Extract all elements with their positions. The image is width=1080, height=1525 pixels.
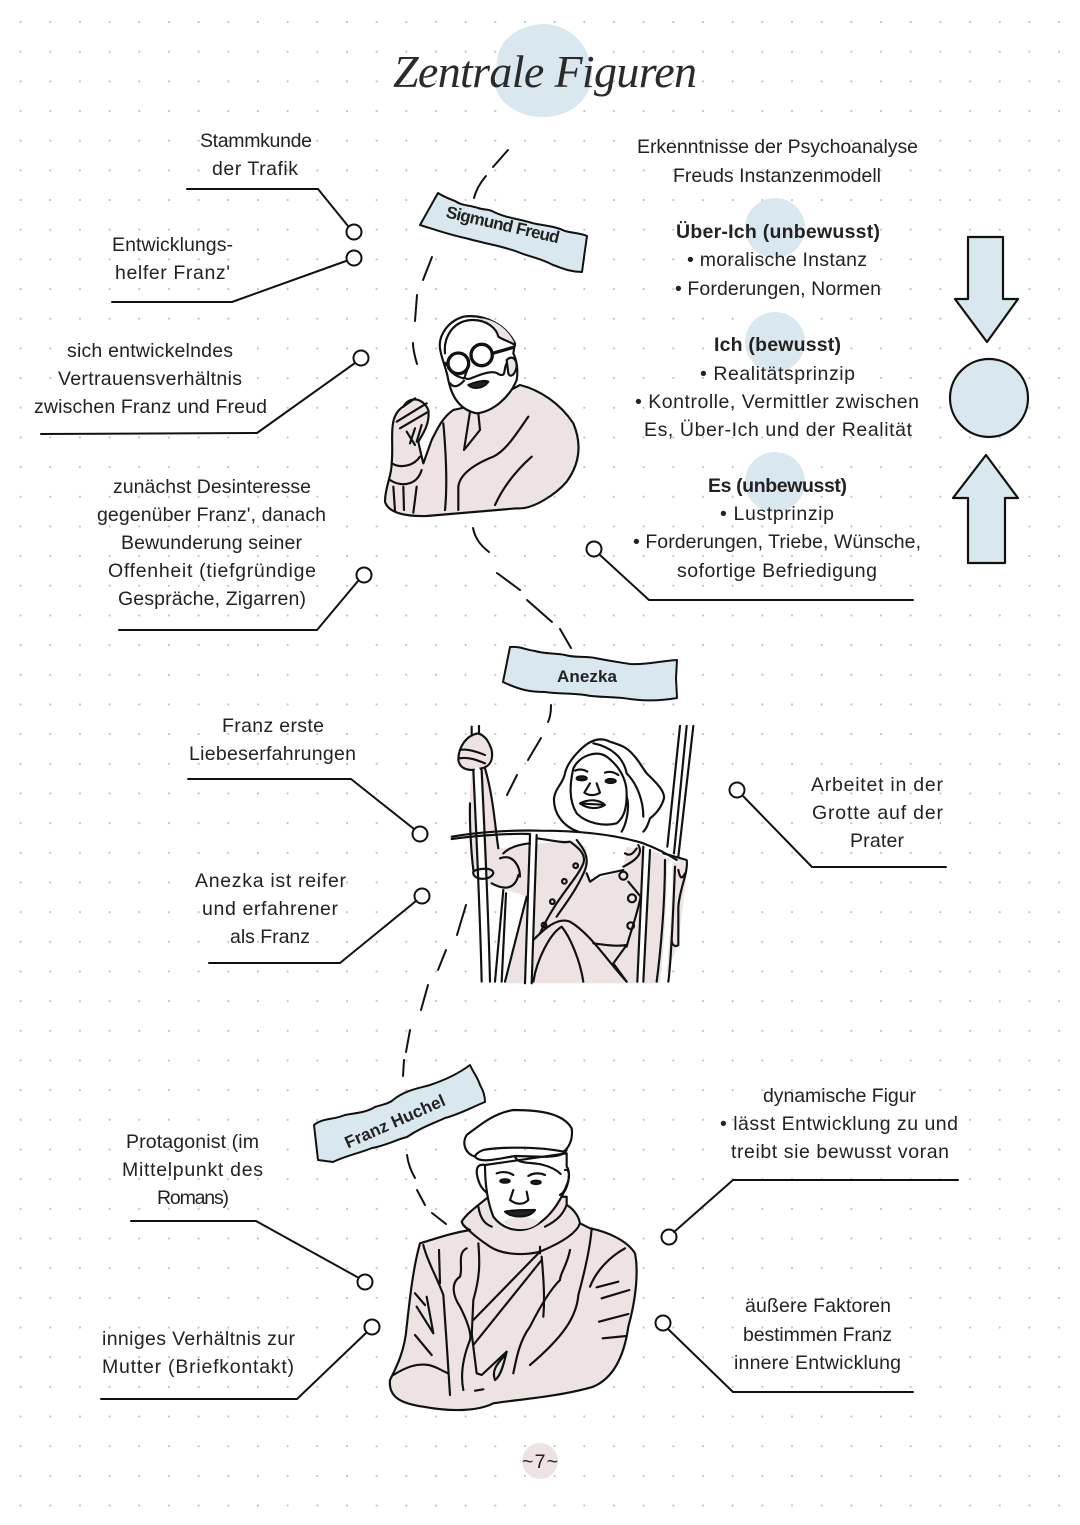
label: Anezka [503,647,677,700]
figure: Freud [385,316,578,516]
callout: Arbeitet in der Grotte: Prater [850,830,904,852]
callout: Protagonist: Mittelpunkt des [122,1159,263,1181]
callout: Desinteresse und Bewunderung: gegenüber Franz', danach [97,504,326,526]
title highlight blob [495,24,592,117]
callout: Entwicklungshelfer: helfer Franz' [115,262,230,284]
text block: Erkenntnisse der Psychoanalyse [637,136,918,187]
callout: Entwicklungshelfer [112,234,362,302]
callout: dynamische Figur: dynamische Figur [763,1085,916,1107]
callout: Liebeserfahrungen: Liebeserfahrungen [189,743,356,765]
text block: Über-Ich: • Forderungen, Normen [675,278,881,300]
text block: Über-Ich: Über-Ich (unbewusst) [676,220,880,243]
callout: Liebeserfahrungen: Franz erste [222,715,324,737]
icon: up arrow [953,455,1018,563]
label: Franz Huchel [314,1065,485,1162]
callout: Desinteresse und Bewunderung: Offenheit (tiefgründige [108,560,316,582]
text block: Es [633,475,921,582]
page number: ~7~ [522,1451,558,1473]
callout: äußere Faktoren: bestimmen Franz [743,1324,892,1346]
callout: Arbeitet in der Grotte [730,774,946,867]
callout: Vertrauensverhältnis: sich entwickelndes [67,340,233,362]
label: Sigmund Freud: Sigmund Freud [444,203,562,247]
callout: äußere Faktoren [656,1295,913,1392]
text block: Es: • Lustprinzip [720,503,834,525]
callout: Anezka ist reifer: Anezka ist reifer [195,870,346,892]
label: Franz Huchel: Franz Huchel [342,1091,448,1152]
text block: Ich: Ich (bewusst) [714,334,841,356]
callout: Anezka ist reifer: und erfahrener [202,898,338,920]
callout: Protagonist [122,1131,372,1290]
text block: Über-Ich: • moralische Instanz [687,249,867,271]
callout: dynamische Figur: treibt sie bewusst voran [731,1141,949,1163]
callout: Entwicklungshelfer: Entwicklungs- [112,234,233,256]
text block: Erkenntnisse der Psychoanalyse: Erkenntnisse der Psychoanalyse [637,136,918,158]
callout: Desinteresse und Bewunderung [97,476,372,630]
text block: Ich: Es, Über-Ich und der Realität [644,419,913,441]
text block: Es: Es (unbewusst) [708,475,847,497]
figure: Franz [390,1110,637,1410]
callout: Desinteresse und Bewunderung: zunächst Desinteresse [113,476,311,498]
callout: äußere Faktoren: innere Entwicklung [734,1352,901,1374]
title: Zentrale Figuren [393,46,697,97]
callout: Vertrauensverhältnis: Vertrauensverhältnis [58,368,242,390]
text block: Erkenntnisse der Psychoanalyse: Freuds Instanzenmodell [673,165,881,187]
callout: Anezka ist reifer: als Franz [230,926,310,948]
callout: Verhältnis zur Mutter [101,1320,380,1399]
text block: Ich [635,334,919,441]
callout: Verhältnis zur Mutter: inniges Verhältnis zur [102,1328,296,1350]
dashed path connecting the figures [403,150,571,1224]
callout: Anezka ist reifer [195,870,430,963]
figure: Anezka [452,726,693,983]
text block: Ich: • Realitätsprinzip [700,363,855,385]
text block: Es: • Forderungen, Triebe, Wünsche, [633,531,921,553]
callout: Stammkunde der Trafik [187,130,362,240]
text block: Es: sofortige Befriedigung [677,560,877,582]
callout: Protagonist: Protagonist (im [126,1131,259,1153]
callout: Arbeitet in der Grotte: Arbeitet in der [811,774,944,796]
label: Sigmund Freud [420,193,587,272]
callout: Vertrauensverhältnis [34,340,368,434]
callout: Arbeitet in der Grotte: Grotte auf der [812,802,944,824]
text block: Über-Ich [675,220,881,300]
text block: Ich: • Kontrolle, Vermittler zwischen [635,391,919,413]
icon: down arrow [955,237,1018,342]
callout: Protagonist: Romans) [157,1187,229,1209]
callout: Liebeserfahrungen [188,715,428,842]
callout: Desinteresse und Bewunderung: Gespräche, Zigarren) [118,588,306,610]
label: Anezka: Anezka [557,667,618,686]
callout: Vertrauensverhältnis: zwischen Franz und Freud [34,396,267,418]
page number [522,1443,558,1479]
highlight circles behind instance headings [745,198,805,512]
callout: Stammkunde der Trafik: der Trafik [212,158,298,180]
connector: Freud to Instanzenmodell [586,542,913,600]
callout: dynamische Figur [662,1085,958,1244]
callout: Verhältnis zur Mutter: Mutter (Briefkontakt) [102,1356,294,1378]
callout: Desinteresse und Bewunderung: Bewunderung seiner [121,532,302,554]
callout: dynamische Figur: • lässt Entwicklung zu und [720,1113,958,1135]
callout: äußere Faktoren: äußere Faktoren [745,1295,891,1317]
icon: circle [950,359,1028,437]
callout: Stammkunde der Trafik: Stammkunde [200,130,312,152]
